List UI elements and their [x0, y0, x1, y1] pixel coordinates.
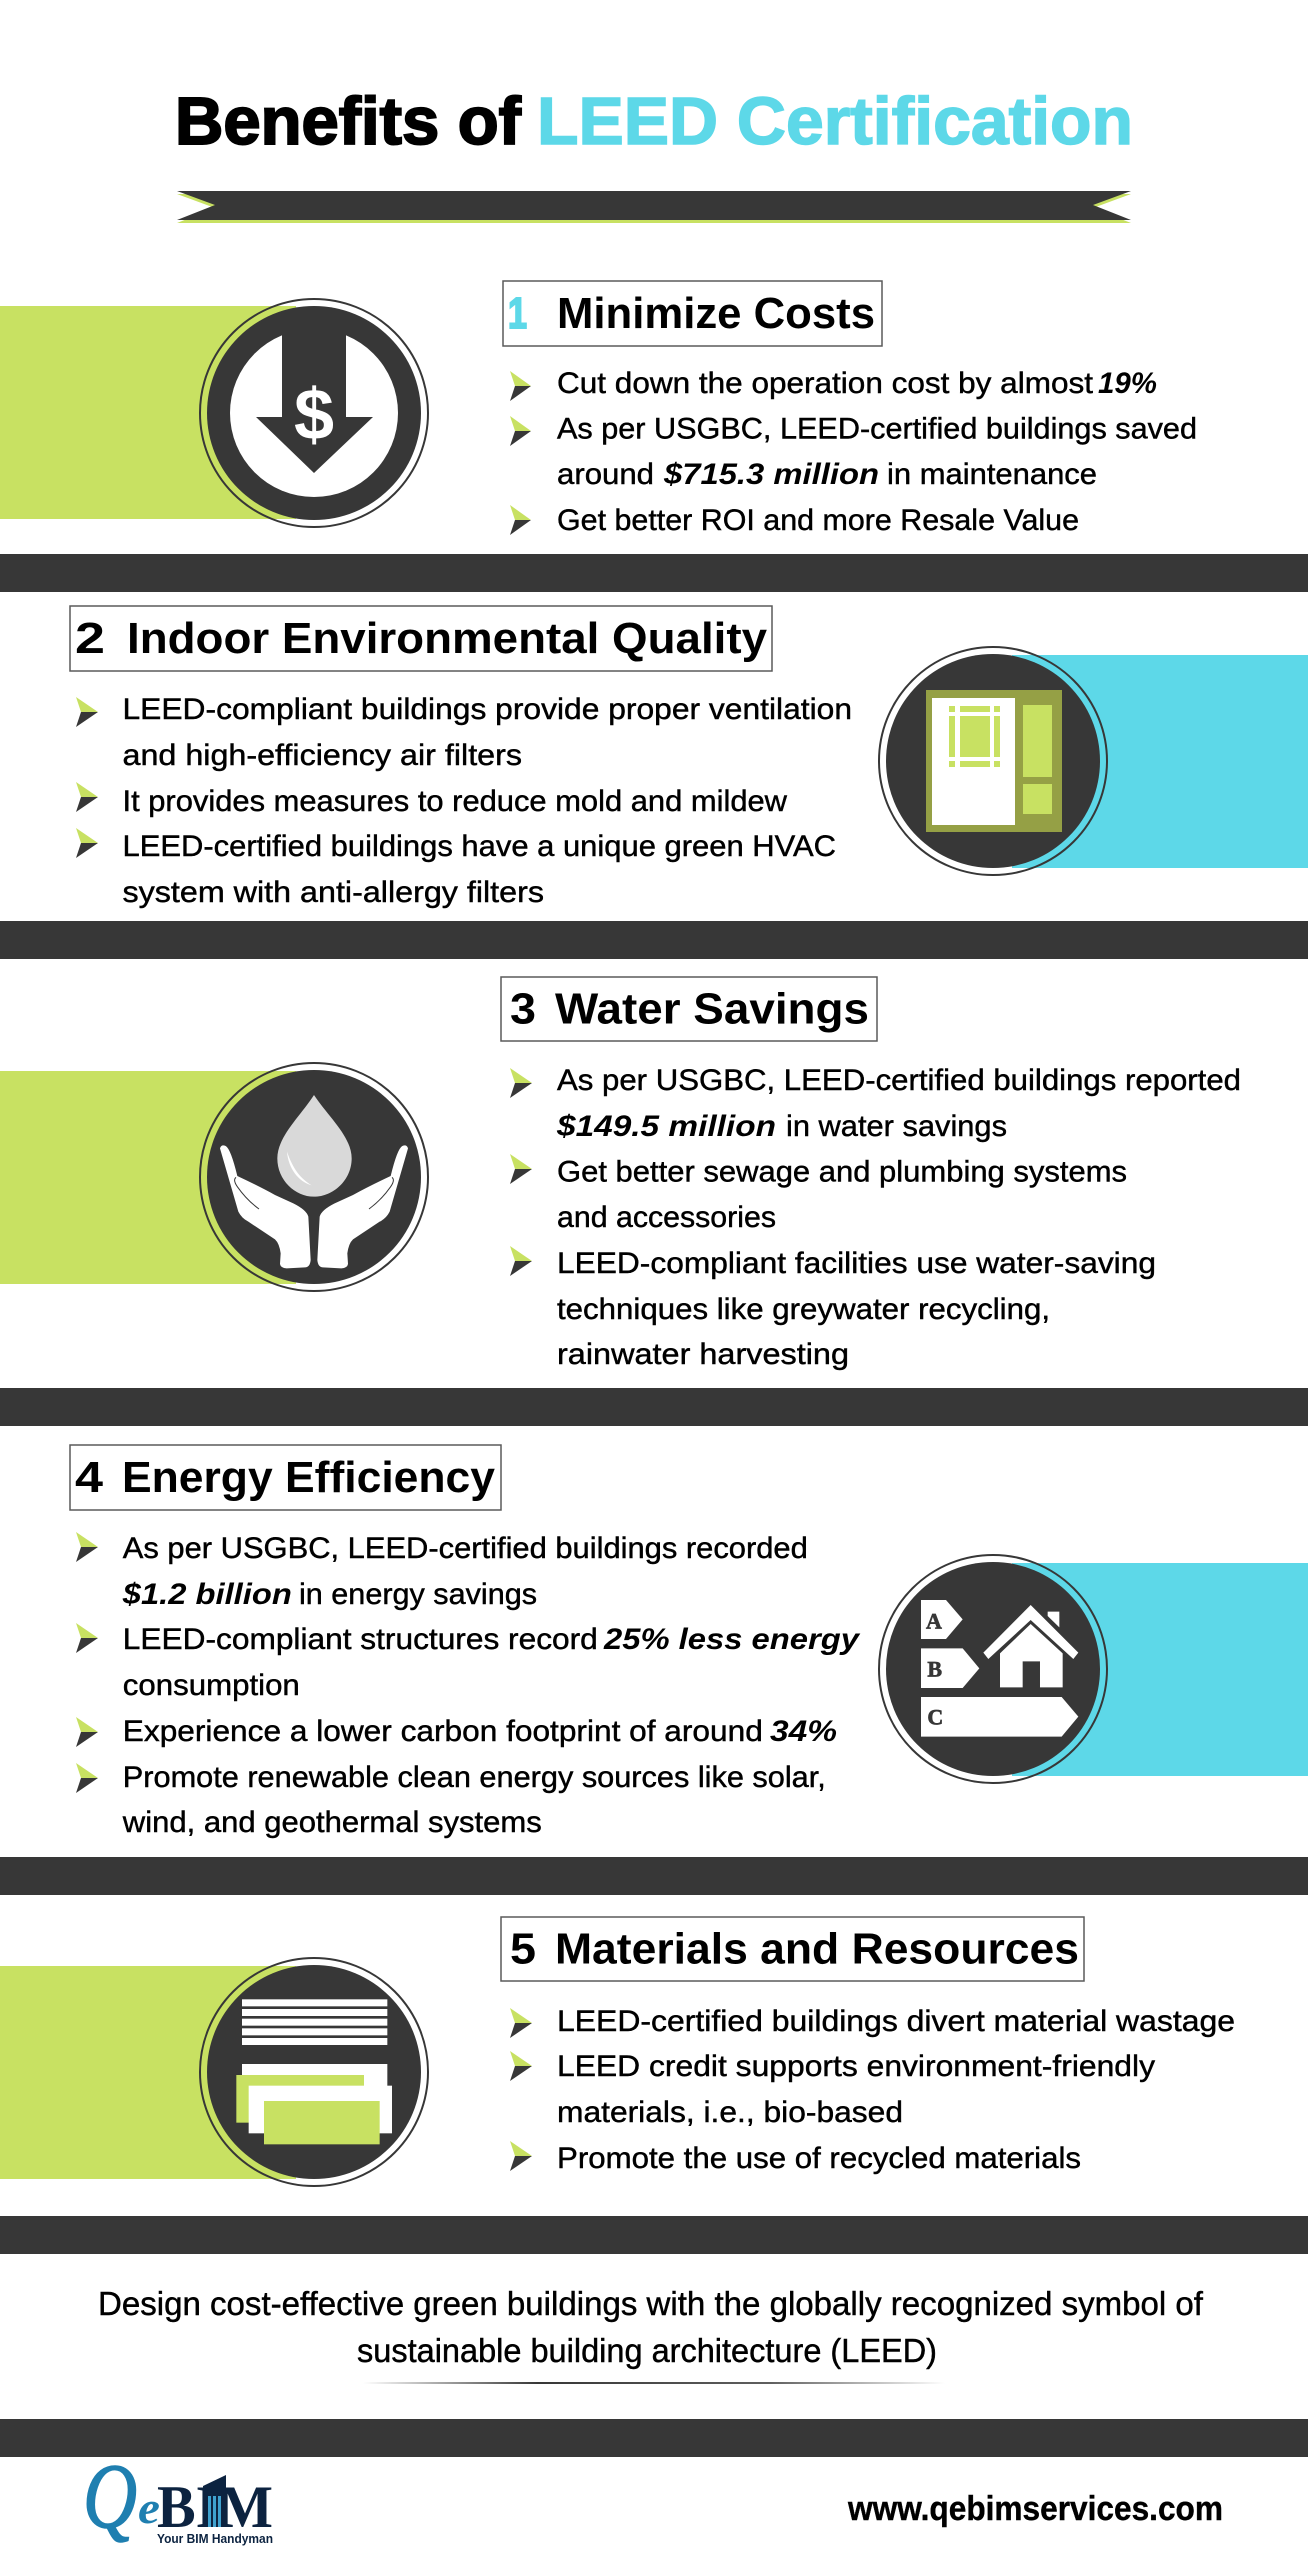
logo: QeBIM: Your BIM Handyman — [157, 2531, 273, 2546]
title ribbon — [177, 191, 1131, 223]
icon: window and door — [879, 647, 1107, 875]
list item: energy savings figure: $1.2 billion — [122, 1578, 292, 1611]
heading: indoor environmental quality — [70, 606, 772, 671]
panel: 2 indoor environmental quality — [70, 606, 1308, 909]
cyan band — [1012, 1563, 1308, 1776]
list item: sewage: and accessories — [557, 1201, 776, 1234]
logo: QeBIM: e — [138, 2482, 160, 2533]
list item: material wastage: LEED-certified buildings divert material wastage — [557, 2005, 1235, 2038]
list item: ventilation: LEED-compliant buildings provide proper ventilation — [122, 693, 852, 726]
list item: water-saving techniques: LEED-compliant facilities use water-saving — [557, 1247, 1156, 1280]
divider bar 4 — [0, 1857, 1308, 1895]
divider bar 6 — [0, 2419, 1308, 2457]
list item: water savings figure: $149.5 million — [556, 1110, 776, 1143]
list item: maintenance savings — [510, 412, 1197, 491]
list item: ventilation: and high-efficiency air filters — [122, 739, 522, 772]
divider bar 2 — [0, 921, 1308, 959]
list item: less energy: LEED-compliant structures record — [123, 1623, 598, 1656]
icon: water drop in hands — [200, 1063, 428, 1291]
icon: material stacks — [200, 1958, 428, 2186]
list item: mold: It provides measures to reduce mold and mildew — [122, 785, 787, 818]
closing statement: sustainable building architecture (LEED) — [357, 2332, 937, 2369]
list item: water savings figure: in water savings — [786, 1110, 1007, 1143]
heading: energy efficiency — [70, 1445, 501, 1510]
panel: 5 materials and resources — [0, 1917, 1235, 2186]
cyan band — [1012, 655, 1308, 868]
heading: materials and resources: Materials and Resources — [555, 1924, 1079, 1974]
list item: HVAC: system with anti-allergy filters — [122, 876, 544, 909]
list item: water savings figure — [510, 1064, 1241, 1143]
list item: maintenance savings: around — [557, 458, 654, 491]
list item: carbon footprint: Experience a lower carbon footprint of around — [123, 1715, 763, 1748]
heading: materials and resources — [501, 1917, 1084, 1981]
icon: energy rating house: B — [927, 1657, 942, 1682]
list item: water-saving techniques: techniques like greywater recycling, — [557, 1293, 1050, 1326]
heading: water savings — [501, 977, 877, 1041]
website url: www.qebimservices.com — [847, 2490, 1223, 2528]
icon: dollar down arrow: $ — [294, 375, 334, 455]
list item: maintenance savings: As per USGBC, LEED-certified buildings saved — [557, 412, 1197, 446]
list item: renewable energy — [76, 1761, 826, 1839]
list item: recycled materials: Promote the use of recycled materials — [557, 2142, 1081, 2175]
panel: 4 energy efficiency — [70, 1445, 1308, 1839]
divider bar 5 — [0, 2216, 1308, 2254]
closing statement: Design cost-effective green buildings with the globally recognized symbol of — [98, 2285, 1204, 2322]
list item: energy savings figure — [76, 1532, 808, 1611]
heading: minimize costs — [503, 281, 882, 346]
list item: energy savings figure: in energy savings — [299, 1578, 537, 1611]
list item: environment-friendly materials — [510, 2050, 1155, 2129]
logo: QeBIM — [83, 2445, 273, 2547]
list item: water-saving techniques: rainwater harvesting — [557, 1338, 849, 1371]
logo: QeBIM: Q — [83, 2445, 137, 2547]
list item: energy savings figure: As per USGBC, LEED-certified buildings recorded — [123, 1532, 808, 1565]
list item: HVAC — [76, 828, 836, 909]
panel: 3 water savings — [0, 977, 1241, 1371]
divider bar 1 — [0, 554, 1308, 592]
list item: sewage — [510, 1154, 1127, 1234]
list item: HVAC: LEED-certified buildings have a unique green HVAC — [122, 830, 836, 863]
title: LEED Certification — [537, 84, 1133, 159]
list item: water-saving techniques — [510, 1246, 1156, 1371]
list item: ventilation — [76, 693, 852, 772]
list item: maintenance savings: in maintenance — [887, 458, 1097, 491]
panel: 1 minimize costs — [0, 281, 1197, 537]
list item: operation cost: 19% — [1098, 367, 1157, 400]
heading: energy efficiency: Energy Efficiency — [122, 1453, 496, 1502]
list item: environment-friendly materials: materials, i.e., bio-based — [557, 2096, 903, 2129]
icon: energy rating house: C — [927, 1705, 943, 1730]
list item: less energy: 25% less energy — [603, 1623, 860, 1656]
list item: maintenance savings: $715.3 million — [663, 458, 879, 491]
green band — [0, 1966, 296, 2179]
divider bar 3 — [0, 1388, 1308, 1426]
green band — [0, 1071, 296, 1284]
list item: less energy: consumption — [123, 1669, 300, 1702]
icon: energy rating house: A — [926, 1608, 942, 1633]
list item: less energy — [76, 1623, 860, 1702]
heading: minimize costs: Minimize Costs — [557, 289, 875, 338]
heading: water savings: Water Savings — [555, 984, 869, 1034]
heading: minimize costs: 1 — [508, 289, 527, 338]
list item: environment-friendly materials: LEED credit supports environment-friendly — [557, 2050, 1155, 2083]
list item: carbon footprint: 34% — [770, 1715, 837, 1748]
list item: renewable energy: Promote renewable clean energy sources like solar, — [123, 1761, 826, 1794]
heading: indoor environmental quality: 2 — [75, 614, 105, 663]
icon: energy rating house — [879, 1555, 1107, 1783]
heading: materials and resources: 5 — [510, 1924, 536, 1974]
heading: water savings: 3 — [510, 984, 536, 1034]
list item: sewage: Get better sewage and plumbing systems — [557, 1156, 1127, 1188]
list item: operation cost: Cut down the operation cost by almost — [557, 367, 1094, 400]
closing statement — [98, 2285, 1204, 2369]
title — [175, 84, 1133, 159]
icon: dollar down arrow — [200, 299, 428, 527]
heading: indoor environmental quality: Indoor Environmental Quality — [127, 614, 768, 663]
title: Benefits of — [175, 84, 522, 159]
logo: QeBIM: BIM — [157, 2474, 273, 2540]
list item: ROI: Get better ROI and more Resale Value — [557, 504, 1079, 537]
heading: energy efficiency: 4 — [75, 1453, 104, 1502]
list item: water savings figure: As per USGBC, LEED-certified buildings reported — [557, 1064, 1241, 1097]
list item: renewable energy: wind, and geothermal systems — [122, 1806, 542, 1839]
green band — [0, 306, 296, 519]
